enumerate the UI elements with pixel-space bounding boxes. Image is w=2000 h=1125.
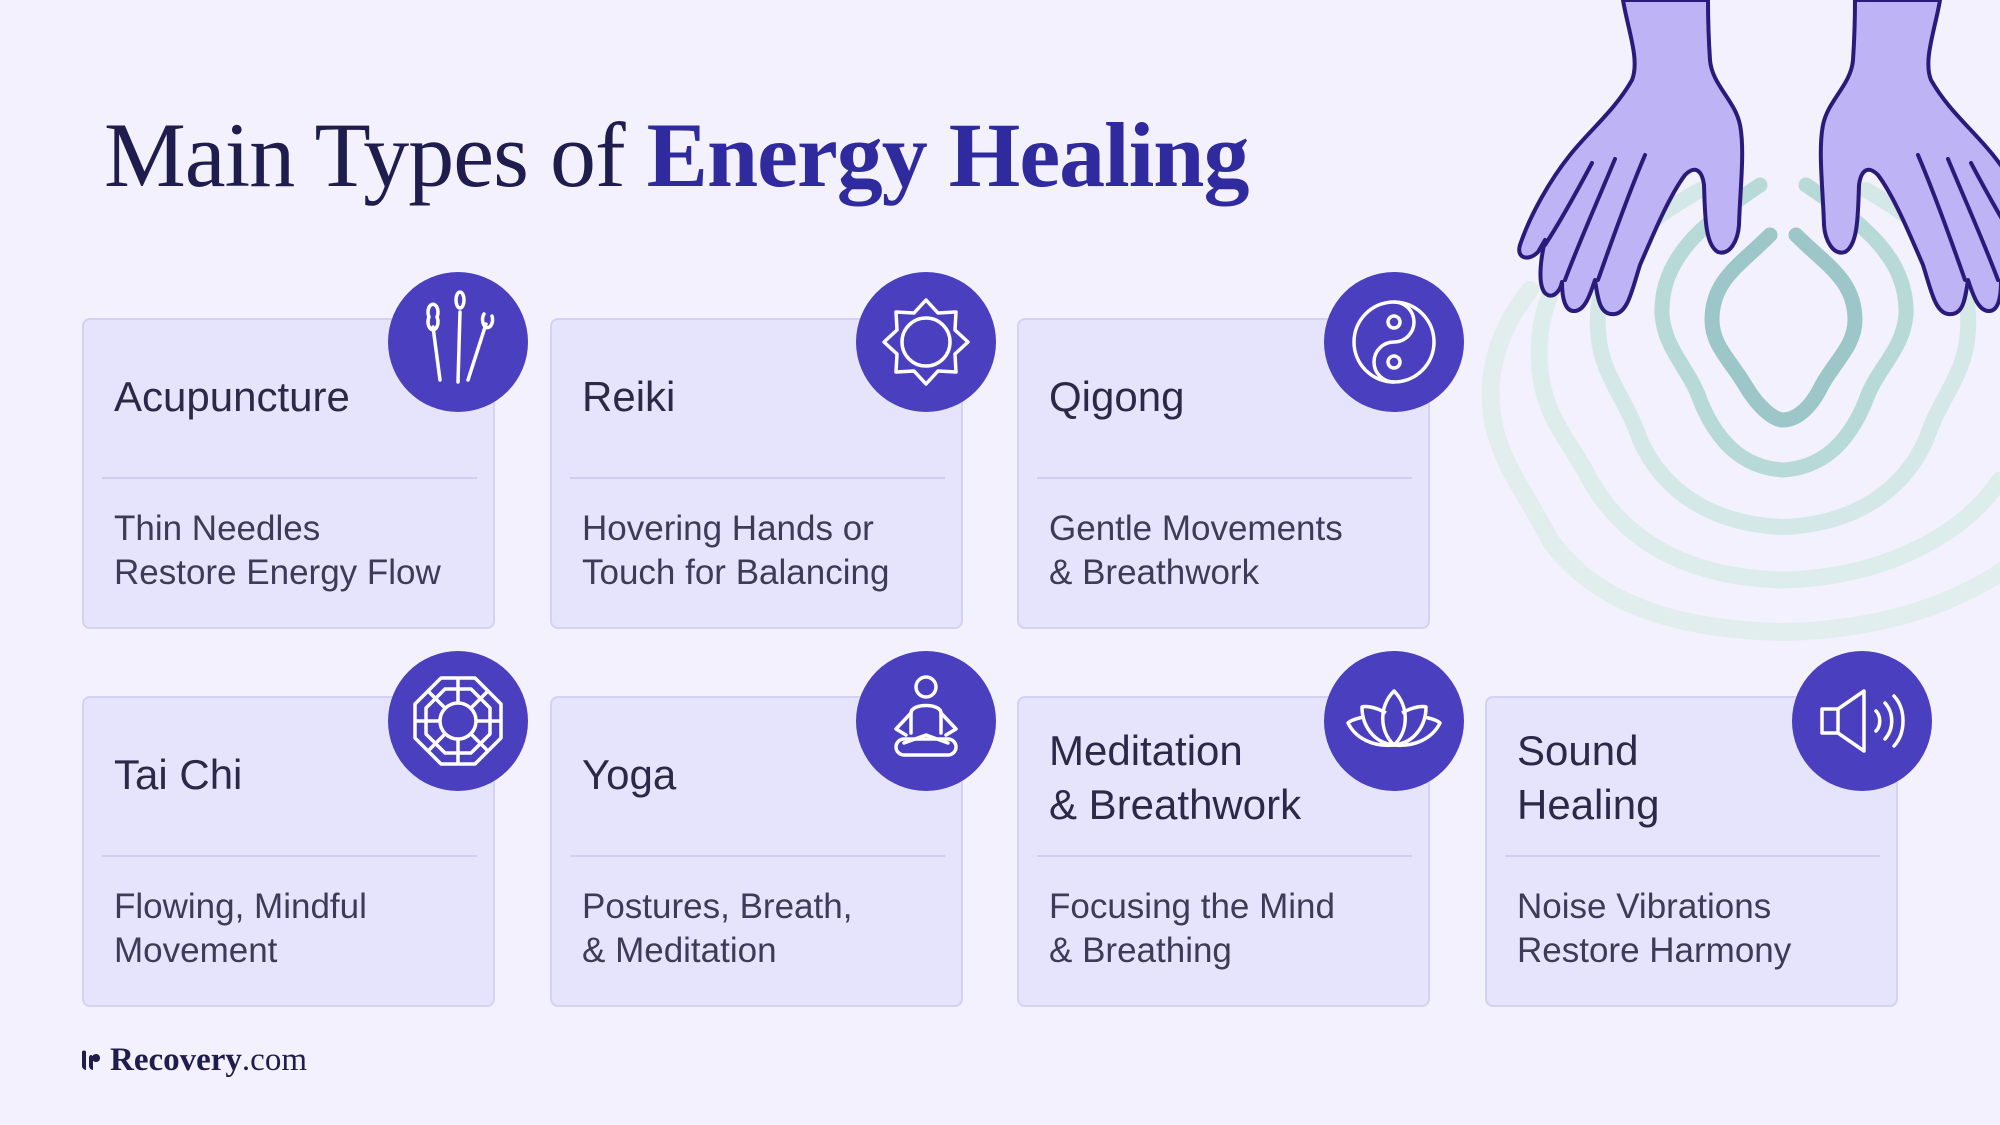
card: Sound Healing: Noise Vibrations	[1517, 887, 1771, 926]
card: Acupuncture	[82, 318, 495, 629]
card: Meditation & Breathwork: Focusing the Mind	[1049, 887, 1335, 926]
card: Tai Chi: Flowing, Mindful	[114, 887, 367, 926]
icon: yoga person	[856, 651, 996, 791]
card: Yoga	[550, 696, 963, 1007]
card: Yoga: Postures, Breath,	[582, 887, 852, 926]
card: Qigong: Gentle Movements	[1049, 509, 1343, 548]
card: Tai Chi: Movement	[114, 931, 277, 970]
card: Acupuncture: Thin Needles	[114, 509, 320, 548]
card: Reiki: Touch for Balancing	[582, 553, 889, 592]
card: Tai Chi: Tai Chi	[114, 751, 242, 798]
icon: yin yang	[1324, 272, 1464, 412]
card: Reiki: Reiki	[582, 373, 675, 420]
card: Sound Healing: Restore Harmony	[1517, 931, 1791, 970]
card: Meditation & Breathwork: & Breathwork	[1049, 781, 1301, 828]
card: Meditation & Breathwork: Meditation	[1049, 727, 1243, 774]
card: Tai Chi	[82, 696, 495, 1007]
logo: Recovery.com	[110, 1042, 307, 1078]
card: Meditation & Breathwork: & Breathing	[1049, 931, 1232, 970]
card: Reiki: Hovering Hands or	[582, 509, 874, 548]
card: Reiki	[550, 318, 963, 629]
icon: bagua	[388, 651, 528, 791]
title: Main Types of Energy Healing	[104, 104, 1248, 206]
icon: needles	[388, 272, 528, 412]
card: Qigong: & Breathwork	[1049, 553, 1259, 592]
card: Sound Healing: Sound	[1517, 727, 1638, 774]
card: Sound Healing: Healing	[1517, 781, 1659, 828]
card: Sound Healing	[1485, 696, 1898, 1007]
icon: lotus	[1324, 651, 1464, 791]
card: Acupuncture: Restore Energy Flow	[114, 553, 441, 592]
card: Yoga: Yoga	[582, 751, 676, 798]
card: Acupuncture: Acupuncture	[114, 373, 350, 420]
card: Meditation & Breathwork	[1017, 696, 1430, 1007]
card: Qigong: Qigong	[1049, 373, 1184, 420]
icon: speaker	[1792, 651, 1932, 791]
card: Qigong	[1017, 318, 1430, 629]
card: Yoga: & Meditation	[582, 931, 777, 970]
icon: sun	[856, 272, 996, 412]
